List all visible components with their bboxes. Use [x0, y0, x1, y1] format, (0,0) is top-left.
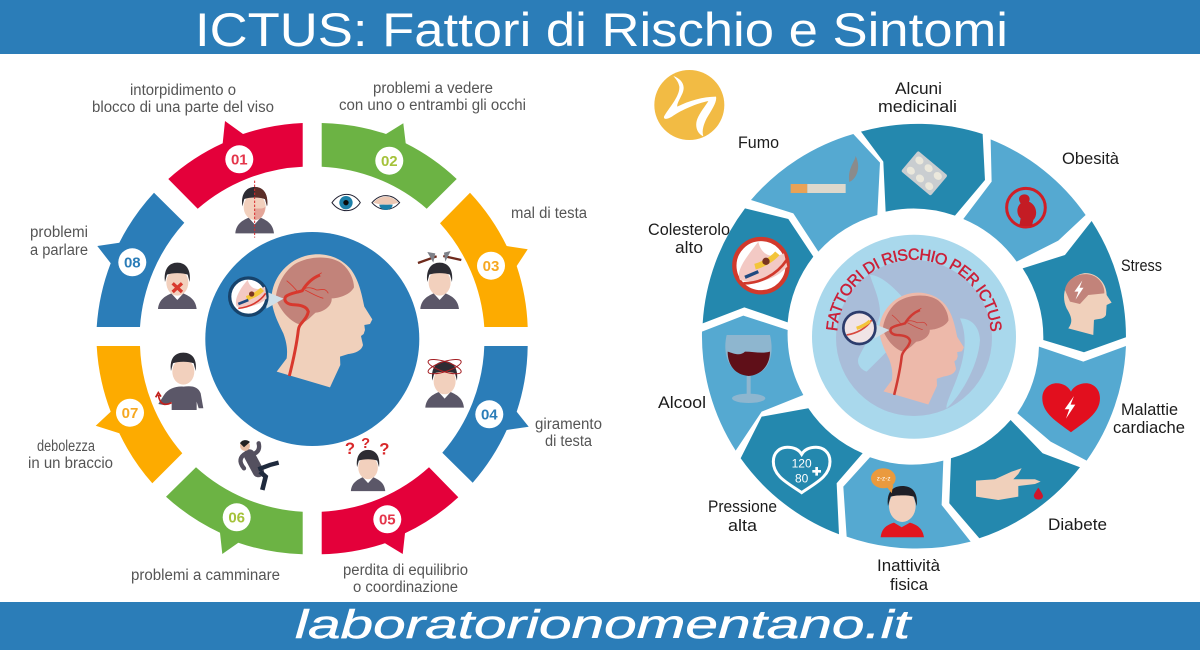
- segment: pressione: [741, 408, 863, 534]
- icon: falling man: [240, 440, 279, 490]
- label 08: problemi: [30, 224, 88, 241]
- label 08: [30, 224, 88, 259]
- center circle: [205, 232, 419, 446]
- icon: finger and drop: [976, 468, 1043, 500]
- header band: [0, 0, 1200, 54]
- label 01: intorpidimento o: [130, 82, 236, 99]
- segment 02: 02: [381, 153, 398, 170]
- segment 07: [96, 346, 182, 483]
- label 05: o coordinazione: [353, 579, 458, 596]
- icon: dizziness: [425, 357, 464, 408]
- segment: inattivita: [843, 457, 971, 549]
- icon: stress head: [1064, 273, 1112, 335]
- icon: blood pressure heart: 120: [792, 456, 812, 470]
- center badge: [812, 234, 1016, 439]
- label 04: giramento: [535, 416, 602, 433]
- segment: diabete: [949, 420, 1080, 538]
- icon: inactive person: [871, 468, 924, 537]
- label 02: problemi a vedere: [373, 80, 493, 97]
- label stress: Stress: [1121, 257, 1162, 275]
- icon: arm weakness: [156, 353, 203, 410]
- segment: fumo: [751, 134, 880, 252]
- label alcuni medicinali: Alcuni: [895, 80, 942, 98]
- label 07: debolezza: [37, 438, 95, 455]
- right labels: [648, 80, 1185, 594]
- segment 08: [97, 193, 184, 327]
- segment: medicinali: [861, 124, 985, 216]
- zoomed icon layer: [156, 181, 464, 491]
- segment 04: [442, 346, 529, 483]
- label 06: problemi a camminare: [131, 567, 280, 584]
- label 04: di testa: [545, 433, 592, 450]
- footer url: laboratorionomentano.it: [295, 603, 913, 647]
- label 04: [535, 416, 602, 450]
- segment: malattie cardiache: [1017, 346, 1126, 461]
- icon: inactive person: z-z-z: [877, 476, 891, 483]
- icon: headache: [418, 251, 461, 309]
- segment 06: [166, 467, 303, 554]
- icon: imbalance: ?: [345, 439, 355, 458]
- label alcuni medicinali: medicinali: [878, 98, 957, 116]
- label 07: [28, 438, 113, 472]
- segment 01: 01: [231, 152, 248, 168]
- panel: sintomi ring: [28, 80, 602, 596]
- segment 05: 05: [379, 512, 396, 528]
- segment 07: 07: [122, 405, 138, 422]
- icon: heart: [1042, 383, 1100, 432]
- icon: imbalance: ?: [379, 440, 389, 459]
- icon: blood pressure heart: 80: [795, 472, 809, 486]
- label 01: [92, 82, 274, 116]
- label 02: con uno o entrambi gli occhi: [339, 97, 526, 114]
- segment: obesita: [963, 139, 1086, 262]
- label malattie cardiache: cardiache: [1113, 419, 1185, 437]
- segment 03: 03: [483, 258, 499, 275]
- icon: face numbness: [235, 181, 274, 238]
- label obesita: Obesità: [1062, 150, 1120, 168]
- segment: stress: [1023, 221, 1126, 352]
- label malattie cardiache: Malattie: [1121, 401, 1178, 419]
- label colesterolo alto: alto: [675, 239, 703, 257]
- panel: fattori di rischio ring: [648, 80, 1185, 594]
- icon: obesity: [1007, 188, 1045, 227]
- label inattivita fisica: [877, 557, 941, 594]
- icon: cholesterol: [734, 239, 788, 292]
- icon: imbalance: [345, 436, 389, 491]
- segment 05: [322, 467, 458, 554]
- label colesterolo alto: Colesterolo: [648, 221, 730, 239]
- label 03: mal di testa: [511, 205, 587, 222]
- segment: colesterolo: [703, 208, 813, 323]
- segment 02: [322, 123, 457, 209]
- label 02: [339, 80, 526, 114]
- segment 06: 06: [228, 510, 245, 526]
- segment 04: 04: [481, 406, 498, 424]
- label 07: in un braccio: [28, 455, 113, 472]
- segment 01: [168, 121, 303, 209]
- icon: cigarette: [791, 156, 858, 193]
- icon: blood pressure heart: [773, 447, 830, 493]
- icon: wine glass: [725, 335, 772, 403]
- head with brain: [230, 254, 372, 387]
- label colesterolo alto: [648, 221, 730, 257]
- label fumo: Fumo: [738, 134, 779, 152]
- label alcuni medicinali: [878, 80, 957, 116]
- left labels: [28, 80, 602, 596]
- label pressione alta: [708, 498, 777, 535]
- label 08: a parlare: [30, 242, 88, 259]
- segment 03: [440, 193, 528, 327]
- segment: alcool: [702, 316, 803, 451]
- logo: [654, 70, 724, 140]
- label pressione alta: Pressione: [708, 498, 777, 516]
- label inattivita fisica: fisica: [890, 576, 929, 594]
- icon: pills: [901, 151, 948, 196]
- footer band: [0, 602, 1200, 650]
- segment 08: 08: [124, 254, 141, 272]
- label diabete: Diabete: [1048, 516, 1107, 534]
- title: ICTUS: Fattori di Rischio e Sintomi: [195, 3, 1008, 56]
- label 01: blocco di una parte del viso: [92, 99, 274, 116]
- icon: speech problem: [158, 263, 197, 309]
- label pressione alta: alta: [728, 517, 758, 535]
- label inattivita fisica: Inattività: [877, 557, 941, 575]
- label 05: perdita di equilibrio: [343, 562, 468, 579]
- icon: imbalance: ?: [361, 436, 370, 452]
- center badge: FATTORI DI RISCHIO PER ICTUS: [826, 248, 1002, 332]
- label alcool: Alcool: [658, 394, 706, 412]
- label 05: [343, 562, 468, 596]
- icon: eyes: [332, 194, 400, 211]
- label malattie cardiache: [1113, 401, 1185, 437]
